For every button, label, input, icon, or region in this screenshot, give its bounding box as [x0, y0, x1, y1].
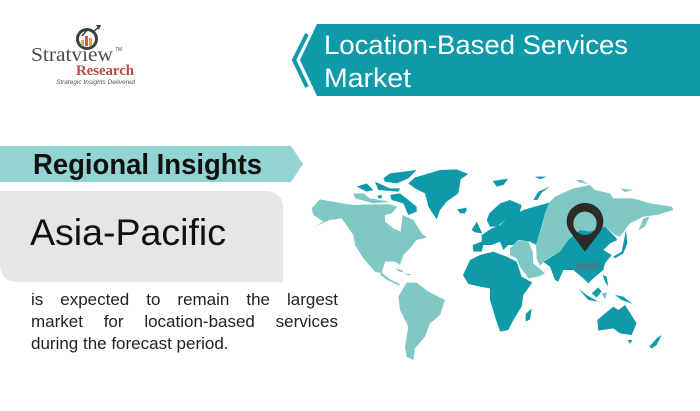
- logo subword: Research: [76, 63, 135, 79]
- title banner: [294, 24, 700, 96]
- icon: magnifier with growth arrow: [78, 25, 101, 48]
- body text: market for location-based services: [31, 312, 338, 331]
- Southeast Asian islands: [578, 275, 633, 304]
- Canadian Arctic islands: [357, 170, 417, 215]
- region name: Asia-Pacific: [30, 212, 226, 253]
- panel background: [0, 191, 283, 282]
- New Zealand: [649, 335, 662, 348]
- North America and Arctic: [312, 170, 427, 273]
- banner title line 2: Market: [324, 63, 412, 93]
- Kamchatka: [639, 217, 649, 230]
- banner shape: [300, 24, 700, 96]
- banner title line 1: Location-Based Services: [324, 30, 628, 60]
- Tasmania: [628, 340, 632, 344]
- Sulawesi: [602, 292, 607, 299]
- Europe: [473, 200, 549, 252]
- Central America: [380, 273, 400, 285]
- Europe and Middle East: [457, 177, 550, 278]
- banner chevron: [294, 34, 307, 87]
- body text: [31, 290, 338, 353]
- Greenland and South America: [380, 169, 468, 360]
- Asia: [536, 180, 673, 283]
- South America: [398, 283, 445, 360]
- Africa, islands and Oceania: [463, 252, 662, 348]
- Iceland: [457, 208, 467, 213]
- logo: Stratview Research: [31, 25, 135, 86]
- Caribbean: [395, 268, 412, 276]
- Novaya Zemlya and Arctic: [575, 180, 633, 192]
- trademark: TM: [115, 47, 122, 53]
- body text: during the forecast period.: [31, 334, 229, 353]
- Greenland: [408, 169, 468, 219]
- ribbon: Regional Insights: [0, 146, 303, 182]
- highlight patch: [573, 263, 602, 269]
- Africa: [463, 252, 532, 332]
- logo wordmark: Stratview: [31, 44, 114, 66]
- panel: Asia-Pacific: [0, 191, 283, 282]
- body text: is expected to remain the largest: [31, 290, 338, 309]
- Canadian islands light: [353, 193, 390, 203]
- ribbon shape: [0, 146, 303, 182]
- Australia: [597, 305, 637, 335]
- Japan: [613, 230, 627, 258]
- world map: [312, 169, 673, 360]
- North America: [312, 199, 427, 273]
- ribbon heading: Regional Insights: [33, 149, 262, 181]
- British Isles: [457, 208, 482, 233]
- logo tagline: Strategic Insights Delivered: [56, 79, 135, 86]
- Russia and Central Asia: [536, 185, 673, 266]
- Iceland-side Arctic islands: [493, 177, 550, 200]
- Madagascar: [526, 308, 532, 322]
- icon: location pin: [567, 203, 603, 252]
- Middle East: [510, 241, 545, 278]
- South and East Asia: [543, 227, 617, 283]
